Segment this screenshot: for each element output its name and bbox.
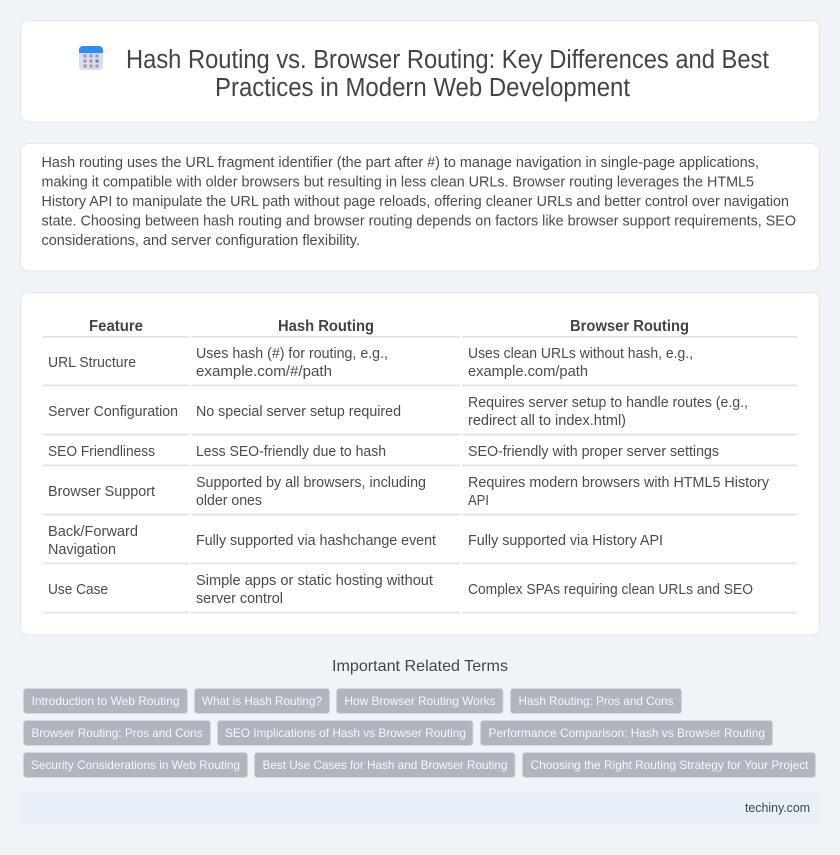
table row: SEO Friendliness: Less SEO-friendly due to hash	[196, 444, 386, 460]
tag	[336, 688, 503, 714]
table row: Back/Forward Navigation: Back/Forward	[48, 524, 138, 540]
table row: Back/Forward Navigation: Navigation	[48, 542, 116, 558]
tag: Choosing the Right Routing Strategy for Your Project	[530, 758, 809, 772]
panel: description	[20, 144, 820, 271]
text block: description	[42, 155, 796, 249]
text block: description: considerations, and server configuration flexibility.	[42, 233, 360, 249]
table row: URL Structure	[48, 346, 693, 380]
tag: Security Considerations in Web Routing	[31, 758, 240, 772]
table row: Use Case: Use Case	[48, 582, 108, 598]
text block: description: state. Choosing between hash routing and browser routing depends on factors like browser support requirements, SEO	[42, 214, 796, 230]
table row: Browser Support: API	[468, 493, 489, 509]
tag	[24, 720, 210, 746]
table header row: Feature	[89, 318, 143, 335]
table row: URL Structure: Uses clean URLs without hash, e.g.,	[468, 346, 693, 362]
table header row	[89, 318, 689, 335]
tag: Hash Routing: Pros and Cons	[518, 694, 674, 708]
text block: description: History API to manipulate the URL path without page reloads, offering cleaner URLs and better control over navigation	[42, 194, 789, 210]
tag	[194, 688, 330, 714]
tag: Introduction to Web Routing	[32, 694, 180, 708]
table row: Browser Support: Requires modern browsers with HTML5 History	[468, 475, 770, 491]
tag	[24, 688, 188, 714]
tag: Browser Routing: Pros and Cons	[32, 726, 202, 740]
tag	[522, 752, 816, 778]
title: Practices in Modern Web Development	[215, 74, 630, 102]
table row: Back/Forward Navigation: Fully supported via History API	[468, 533, 663, 549]
tag	[218, 720, 473, 746]
text block: description: Hash routing uses the URL fragment identifier (the part after #) to manage navigation in single-page applications,	[42, 155, 759, 171]
tag	[254, 752, 515, 778]
table row: Browser Support: older ones	[196, 493, 262, 509]
table row: Use Case: Complex SPAs requiring clean URLs and SEO	[468, 582, 753, 598]
footer credit: techiny.com	[745, 800, 810, 815]
tag: What is Hash Routing?	[202, 694, 322, 708]
table header row: Browser Routing	[570, 318, 689, 335]
tag: SEO Implications of Hash vs Browser Routing	[225, 726, 466, 740]
table row: Use Case: Simple apps or static hosting without	[196, 573, 433, 589]
table row: URL Structure: Uses hash (#) for routing, e.g.,	[196, 346, 388, 362]
heading: related terms: Important Related Terms	[332, 658, 508, 675]
table row: Server Configuration	[48, 395, 748, 429]
tag	[510, 688, 682, 714]
table row: Server Configuration: Requires server setup to handle routes (e.g.,	[468, 395, 748, 411]
title	[126, 46, 769, 102]
tag: Performance Comparison: Hash vs Browser Routing	[488, 726, 765, 740]
table row: Use Case: server control	[196, 591, 283, 607]
table row: Server Configuration: redirect all to index.html)	[468, 413, 626, 429]
table row: SEO Friendliness: SEO Friendliness	[48, 444, 155, 460]
footer bar	[20, 791, 820, 825]
tag: How Browser Routing Works	[344, 694, 496, 708]
tag	[24, 752, 248, 778]
panel: header	[20, 20, 820, 122]
panel: related term tags	[24, 688, 816, 778]
panel: comparison table	[20, 292, 820, 635]
table row: Use Case	[48, 573, 753, 607]
table row: URL Structure: example.com/path	[468, 364, 588, 380]
table row: URL Structure: example.com/#/path	[196, 364, 332, 380]
table row: SEO Friendliness: SEO-friendly with proper server settings	[468, 444, 719, 460]
table row: Server Configuration: No special server setup required	[196, 404, 401, 420]
tag: Best Use Cases for Hash and Browser Routing	[262, 758, 508, 772]
table row: URL Structure: URL Structure	[48, 355, 136, 371]
icon: calendar grid	[79, 46, 103, 70]
title: Hash Routing vs. Browser Routing: Key Differences and Best	[126, 46, 769, 74]
text block: description: making it compatible with older browsers but resulting in less clean URLs. Browser routing leverages the HTML5	[42, 174, 754, 190]
table row: Browser Support: Browser Support	[48, 484, 155, 500]
table row: Server Configuration: Server Configuration	[48, 404, 178, 420]
table row: Browser Support: Supported by all browsers, including	[196, 475, 426, 491]
table header row: Hash Routing	[278, 318, 374, 335]
table row: Browser Support	[48, 475, 770, 509]
table row: Back/Forward Navigation: Fully supported via hashchange event	[196, 533, 436, 549]
table row: Back/Forward Navigation	[48, 524, 663, 558]
table row: SEO Friendliness	[48, 444, 719, 460]
tag	[480, 720, 772, 746]
